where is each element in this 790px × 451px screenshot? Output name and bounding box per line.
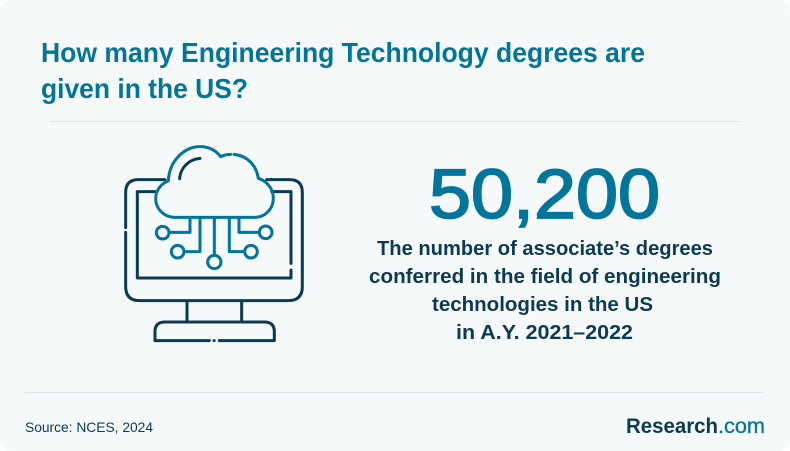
description: The number of associate’s degrees xyxy=(377,238,713,260)
description: conferred in the field of engineering xyxy=(369,266,721,288)
logo: Research xyxy=(626,415,718,438)
title: How many Engineering Technology degrees are xyxy=(41,37,645,68)
source: Source: NCES, 2024 xyxy=(25,419,153,435)
cloud highlight xyxy=(180,158,200,179)
circuit nodes xyxy=(156,226,272,269)
monitor stand and base xyxy=(155,301,274,341)
description: technologies in the US xyxy=(432,294,653,316)
cloud xyxy=(156,147,273,217)
circuit lines xyxy=(169,218,259,255)
description: in A.Y. 2021–2022 xyxy=(456,322,633,344)
description xyxy=(369,238,721,344)
monitor screen xyxy=(137,192,291,278)
title: given in the US? xyxy=(41,73,248,104)
monitor frame xyxy=(126,180,302,301)
title xyxy=(41,37,645,104)
big number: 50,200 xyxy=(429,155,660,233)
logo: .com xyxy=(718,415,765,438)
logo xyxy=(626,415,765,438)
icon: monitor with cloud network xyxy=(126,147,302,341)
